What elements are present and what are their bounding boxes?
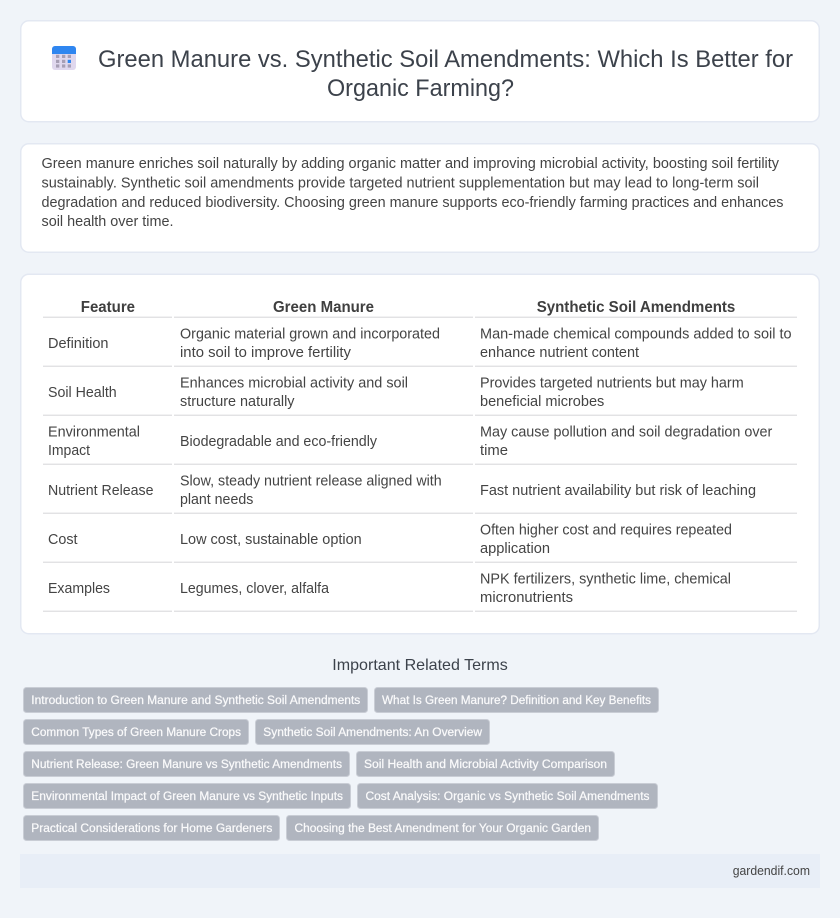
table row: soil health: Provides targeted nutrients but may harm: [480, 375, 744, 391]
tag: Practical Considerations for Home Gardeners: [31, 821, 272, 835]
panel: related term tags: [24, 688, 658, 840]
table row: environmental impact: Impact: [48, 443, 90, 459]
table row: nutrient release: Fast nutrient availability but risk of leaching: [480, 483, 756, 499]
tag: [358, 784, 658, 808]
table row: environmental impact: May cause pollution and soil degradation over: [480, 424, 773, 440]
table header row: Green Manure: [273, 299, 374, 316]
panel: comparison table: [21, 274, 819, 634]
table row: cost: application: [480, 541, 550, 557]
description text: soil health over time.: [42, 214, 174, 230]
description text: degradation and reduced biodiversity. Choosing green manure supports eco-friendly farming practices and enhances: [42, 195, 784, 211]
description text: Green manure enriches soil naturally by adding organic matter and improving microbial activity, boosting soil fertility: [42, 156, 780, 172]
table row: nutrient release: [43, 473, 797, 514]
tag: [286, 816, 598, 840]
tag: [24, 688, 368, 712]
tag: Cost Analysis: Organic vs Synthetic Soil Amendments: [366, 789, 650, 803]
tag: Nutrient Release: Green Manure vs Synthetic Amendments: [31, 757, 342, 771]
table row: cost: [43, 522, 797, 563]
table row: definition: [43, 326, 797, 367]
table row: soil health: Soil Health: [48, 385, 117, 401]
footer bar: [20, 854, 820, 888]
title: [98, 46, 793, 102]
table row: nutrient release: Slow, steady nutrient release aligned with: [180, 473, 442, 489]
table row: cost: Low cost, sustainable option: [180, 532, 362, 548]
table row: soil health: [43, 375, 797, 416]
table header row: Feature: [81, 299, 135, 316]
tag: [256, 720, 490, 744]
tag: Environmental Impact of Green Manure vs Synthetic Inputs: [31, 789, 343, 803]
table row: examples: Legumes, clover, alfalfa: [180, 581, 329, 597]
tag: [24, 816, 280, 840]
tag: [24, 720, 248, 744]
tag: Soil Health and Microbial Activity Comparison: [364, 757, 607, 771]
table row: examples: NPK fertilizers, synthetic lime, chemical: [480, 571, 731, 587]
table row: cost: Often higher cost and requires repeated: [480, 522, 732, 538]
table header row: [43, 299, 797, 318]
tag: [374, 688, 658, 712]
description text: [42, 156, 784, 230]
table row: environmental impact: Biodegradable and eco-friendly: [180, 434, 378, 450]
tag: Introduction to Green Manure and Synthetic Soil Amendments: [31, 693, 360, 707]
table row: soil health: beneficial microbes: [480, 394, 604, 410]
tag: What Is Green Manure? Definition and Key Benefits: [382, 693, 651, 707]
title: Green Manure vs. Synthetic Soil Amendments: Which Is Better for: [98, 46, 793, 73]
table row: soil health: structure naturally: [180, 394, 295, 410]
tag: Common Types of Green Manure Crops: [31, 725, 241, 739]
table row: definition: enhance nutrient content: [480, 345, 639, 361]
table row: soil health: Enhances microbial activity and soil: [180, 375, 408, 391]
icon: calendar: [52, 46, 76, 70]
table header row: Synthetic Soil Amendments: [537, 299, 735, 316]
tag: [24, 784, 350, 808]
heading: important related terms: Important Related Terms: [332, 657, 508, 674]
tag: [24, 752, 350, 776]
table row: environmental impact: Environmental: [48, 424, 140, 440]
table row: examples: [43, 571, 797, 612]
table row: examples: micronutrients: [480, 590, 573, 606]
panel: title card: [21, 21, 819, 122]
table row: examples: Examples: [48, 581, 110, 597]
description text: sustainably. Synthetic soil amendments provide targeted nutrient supplementation but may lead to long-term soil: [42, 176, 759, 192]
table row: nutrient release: Nutrient Release: [48, 483, 154, 499]
tag: Synthetic Soil Amendments: An Overview: [263, 725, 482, 739]
tag: Choosing the Best Amendment for Your Organic Garden: [294, 821, 591, 835]
title: Organic Farming?: [327, 75, 514, 102]
table row: cost: Cost: [48, 532, 78, 548]
table row: environmental impact: time: [480, 443, 508, 459]
table row: environmental impact: [43, 424, 797, 465]
table row: definition: Organic material grown and incorporated: [180, 326, 440, 342]
footer site name: gardendif.com: [733, 863, 810, 878]
tag: [356, 752, 614, 776]
panel: description: [21, 144, 819, 252]
table row: nutrient release: plant needs: [180, 492, 253, 508]
table row: definition: Definition: [48, 336, 108, 352]
table row: definition: Man-made chemical compounds added to soil to: [480, 326, 792, 342]
table row: definition: into soil to improve fertility: [180, 345, 352, 361]
